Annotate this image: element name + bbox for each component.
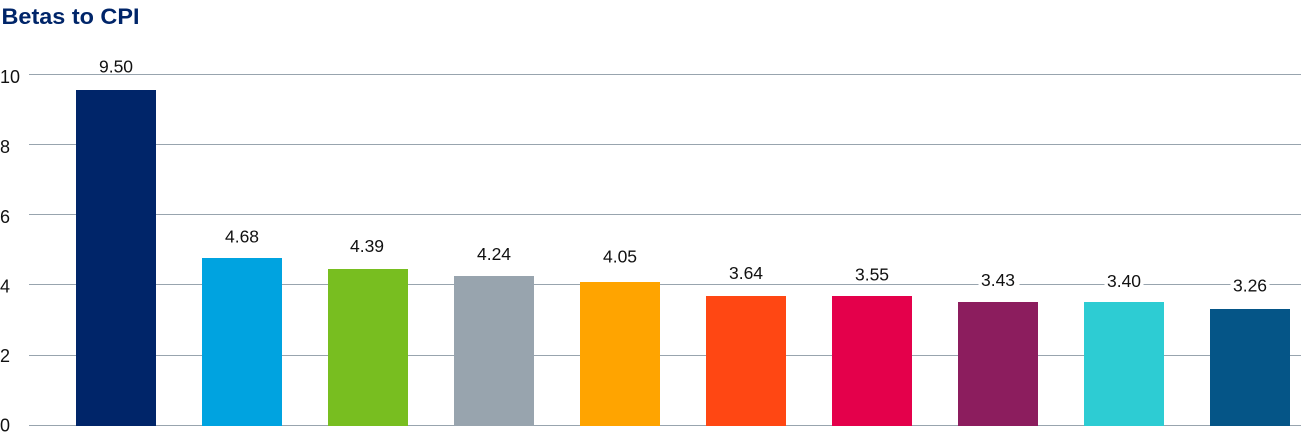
y-axis labels: 4 — [0, 276, 10, 296]
y-axis labels: 2 — [0, 346, 10, 366]
value labels: 3.26 — [1233, 276, 1267, 296]
value labels — [99, 56, 1267, 296]
title: Betas to CPI — [2, 4, 140, 29]
y-axis labels: 10 — [0, 67, 20, 87]
value labels: 3.40 — [1107, 271, 1141, 291]
value labels: 4.39 — [350, 236, 384, 256]
value labels: 4.68 — [225, 226, 259, 246]
value labels: 4.24 — [477, 244, 511, 264]
y-axis labels: 8 — [0, 137, 10, 157]
y-axis labels — [0, 67, 20, 436]
label backgrounds — [978, 272, 1270, 294]
value labels: 4.05 — [603, 246, 637, 266]
value labels: 3.43 — [981, 270, 1015, 290]
y-axis labels: 6 — [0, 207, 10, 227]
y-axis labels: 0 — [0, 416, 10, 436]
bars — [76, 90, 1290, 426]
value labels: 3.64 — [729, 263, 763, 283]
value labels: 3.55 — [855, 264, 889, 284]
value labels: 9.50 — [99, 56, 133, 76]
